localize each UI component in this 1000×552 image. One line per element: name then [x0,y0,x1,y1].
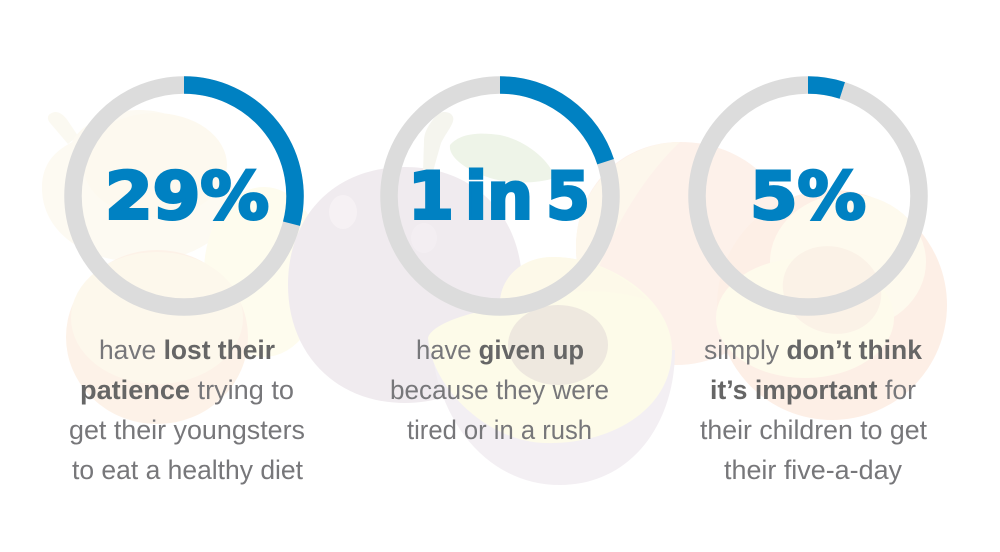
caption: given up: because they were [390,375,609,405]
caption: given up: have given up [416,335,584,365]
ring: 5 percent [697,85,919,307]
caption: lost patience: patience trying to [80,375,294,405]
caption: lost patience: to eat a healthy diet [72,455,303,485]
caption: don't think it's important: their children to get [700,415,927,445]
fruit: purple plum [288,167,522,403]
caption: don't think it's important: it’s important for [710,375,916,405]
caption: don't think it's important: simply don’t think [704,335,923,365]
caption: given up [390,335,609,445]
fruit: right halved peach [716,190,947,420]
fruit: left cream peach [42,110,235,262]
caption: don't think it's important: their five-a-day [724,455,902,485]
number: 1 in 5: 5 [546,160,590,234]
number: 29%: 29% [105,160,269,234]
fruit: halved plum [428,257,675,485]
fruit: left yellow plum [204,187,324,357]
number: 5%: 5% [750,160,866,234]
ring: 1 in 5 [389,85,611,307]
number: 1 in 5 [408,160,590,234]
stat 1: 29 percent [69,85,305,485]
stat 2: 1 in 5 [389,85,611,445]
caption: lost patience: have lost their [99,335,275,365]
background illustration: pale fruits [42,110,947,485]
number: 1 in 5: 1 [408,160,454,234]
fruit: plum stem [423,112,453,175]
ring: 29 percent [73,85,295,307]
stat 3: 5 percent [697,85,927,485]
fruit: plum leaf [450,134,555,182]
fruit: right red peach [576,142,790,365]
caption: given up: tired or in a rush [407,415,592,445]
fruit: left halved peach [66,250,248,424]
caption: lost patience [69,335,305,485]
number: 1 in 5: in [465,160,533,234]
caption: lost patience: get their youngsters [69,415,305,445]
caption: don't think it's important [700,335,927,485]
